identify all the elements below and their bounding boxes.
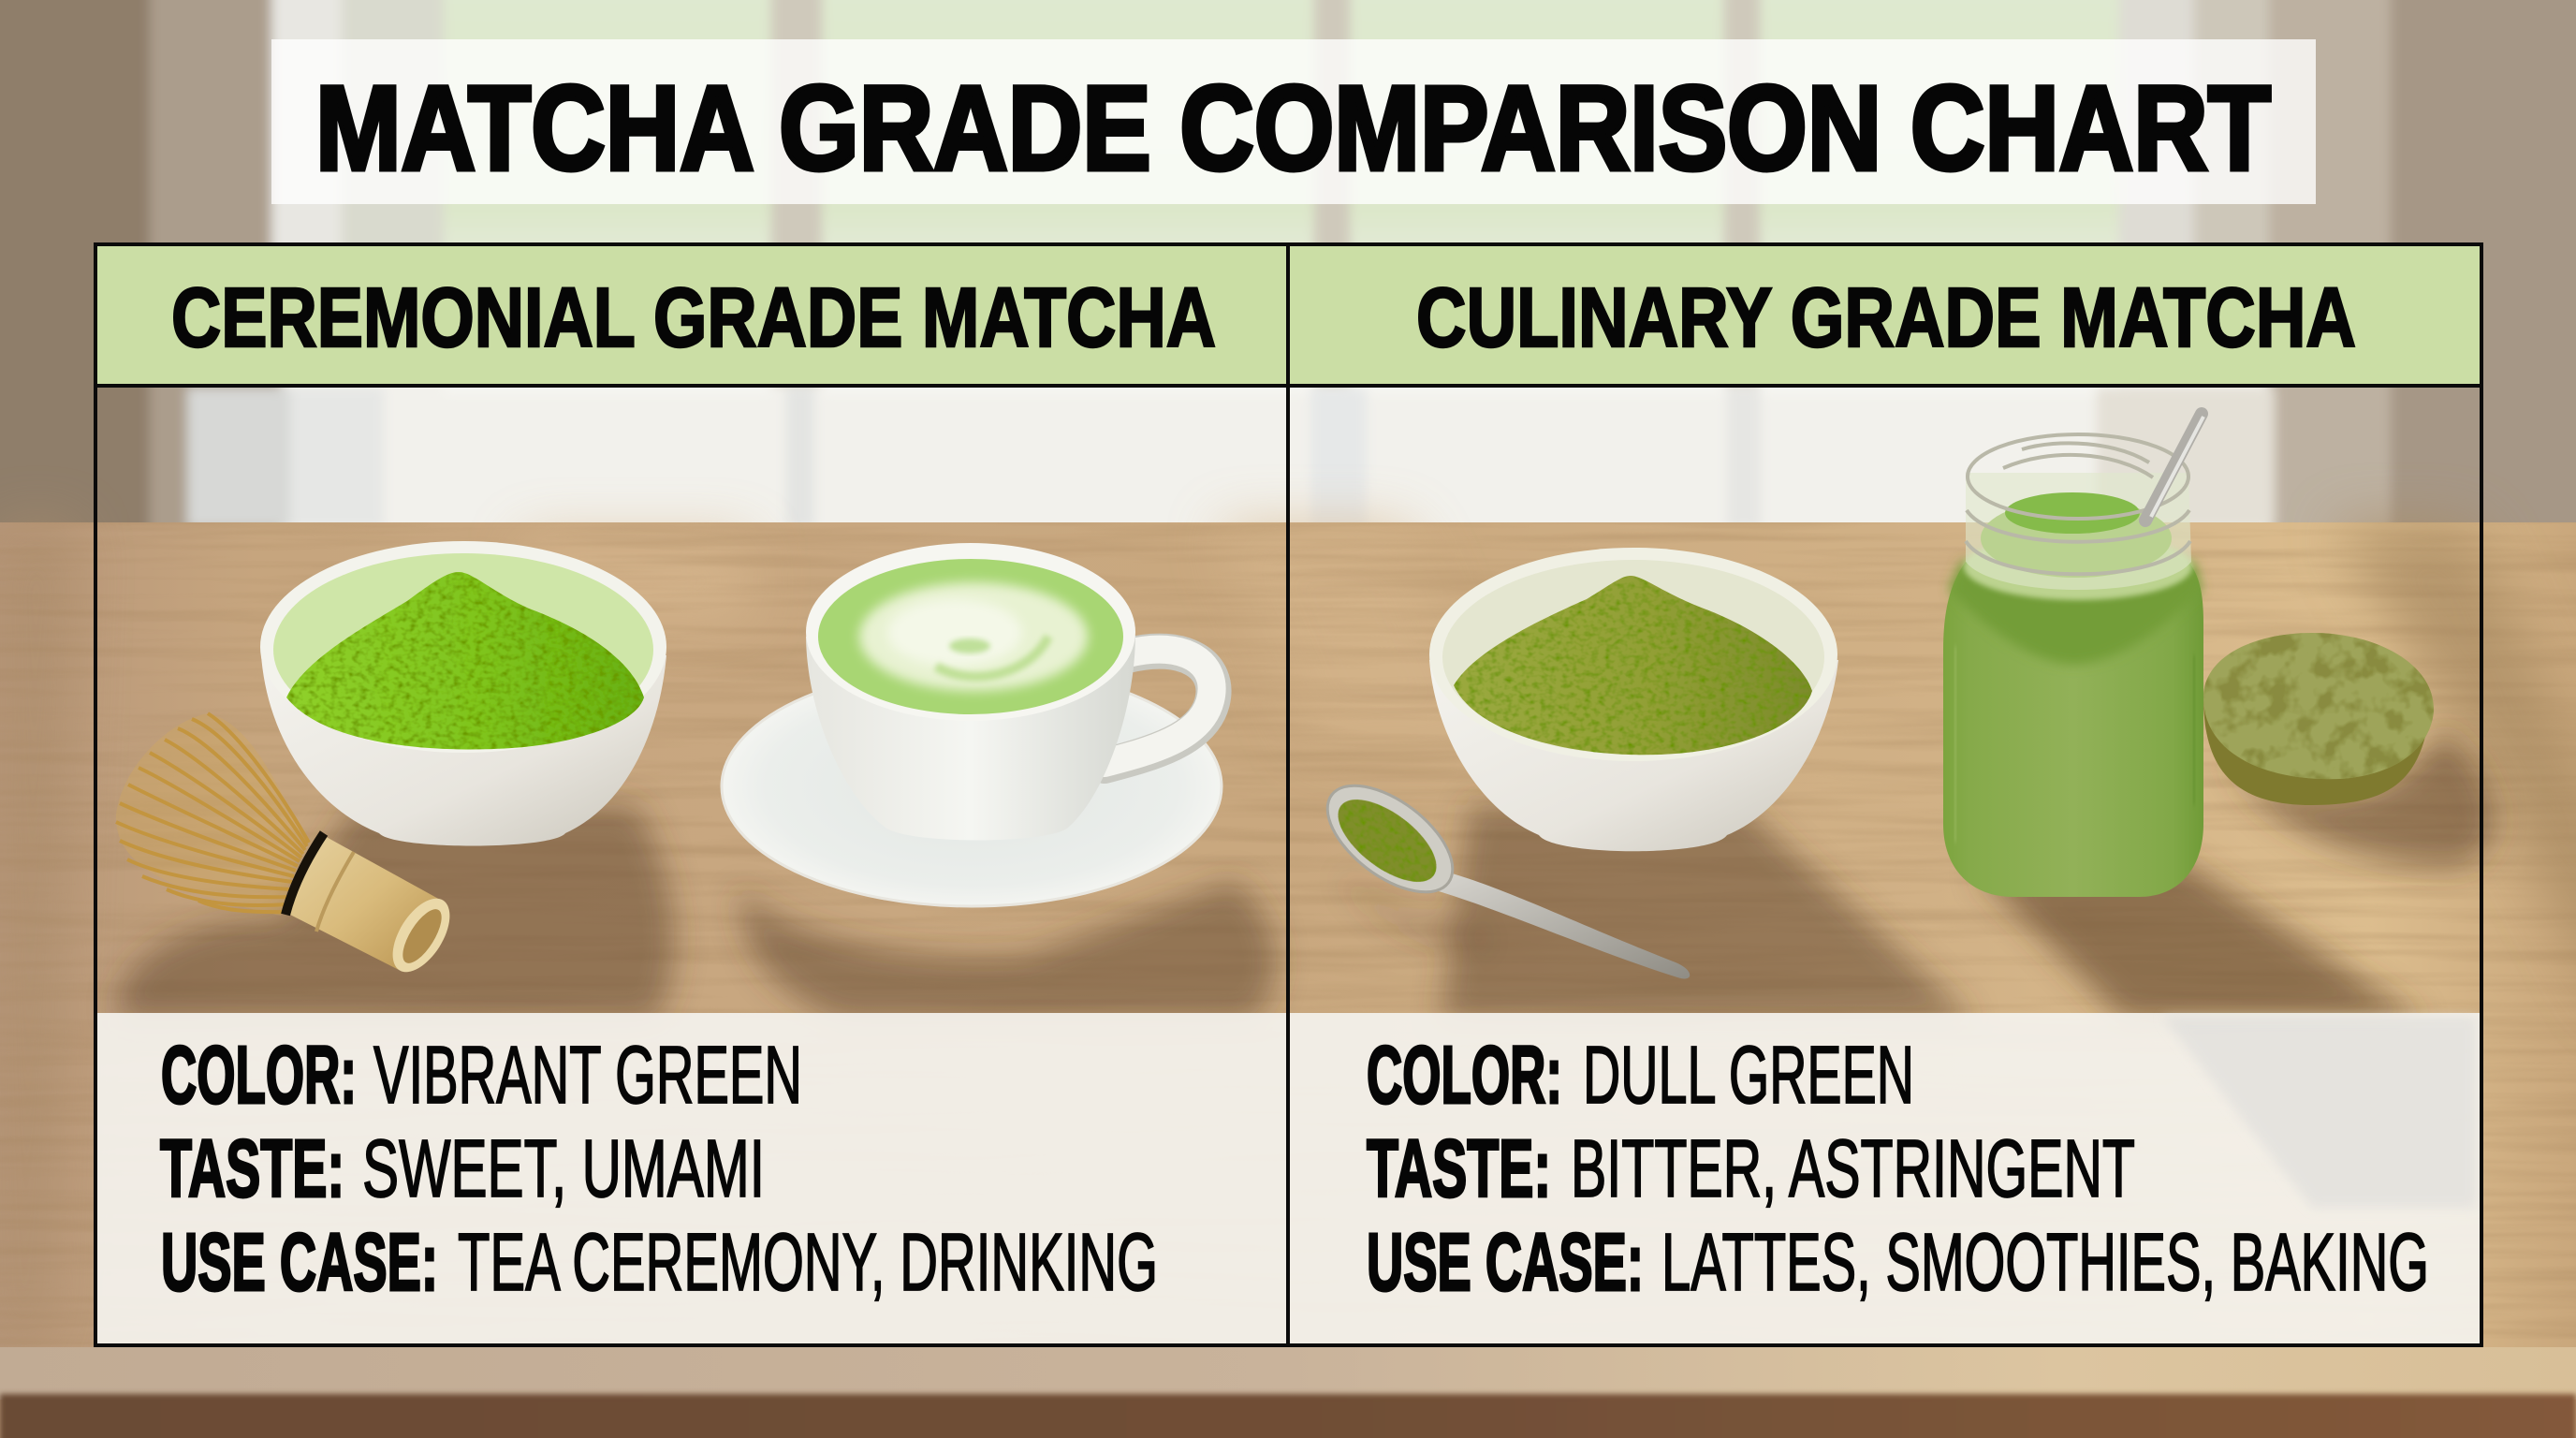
ceremonial info panel [96,1013,1288,1344]
color row: COLOR: [1367,1030,1562,1121]
powder mound [1454,576,1812,755]
culinary header band [1288,245,2480,385]
color row: DULL GREEN [1583,1030,1914,1121]
latte foam [818,559,1123,714]
title text: MATCHA GRADE COMPARISON CHART [315,62,2271,196]
color row [161,1030,802,1121]
powder mound [286,572,644,749]
use case row: USE CASE: [161,1217,438,1308]
icon: latte cup [806,543,1214,841]
table border lines [95,244,2481,1345]
icon: saucer [722,667,1222,906]
bottom front edge of the table [0,1347,2576,1438]
title banner [271,39,2316,204]
taste row [160,1123,765,1214]
icon: bowl of vibrant matcha powder [260,541,666,846]
taste row [1367,1123,2135,1214]
taste row: BITTER, ASTRINGENT [1571,1123,2135,1214]
panel: ceremonial grade matcha [96,245,1288,1344]
background: wooden table [0,522,2576,1438]
taste row: TASTE: [1367,1123,1551,1214]
color row: VIBRANT GREEN [373,1030,802,1121]
icon: bowl of dull matcha powder [1429,548,1838,851]
icon: matcha cookie [2203,633,2434,805]
culinary info panel [1288,1013,2480,1344]
use case row: USE CASE: [1367,1217,1644,1308]
ceremonial header band: CEREMONIAL GRADE MATCHA [171,271,1216,365]
use case row: TEA CEREMONY, DRINKING [458,1217,1158,1308]
use case row [1367,1217,2429,1308]
background: window and wall [0,0,2576,543]
icon: bamboo whisk [116,713,461,982]
taste row: TASTE: [160,1123,344,1214]
culinary header band: CULINARY GRADE MATCHA [1416,271,2356,365]
taste row: SWEET, UMAMI [362,1123,765,1214]
ceremonial header band [96,245,1288,385]
table shadows [119,730,2494,1020]
color row [1367,1030,1914,1121]
icon: spoon with powder [1310,765,1690,978]
icon: smoothie jar with straw [1943,414,2203,897]
panel: culinary grade matcha [1288,245,2480,1344]
use case row [161,1217,1158,1308]
color row: COLOR: [161,1030,357,1121]
